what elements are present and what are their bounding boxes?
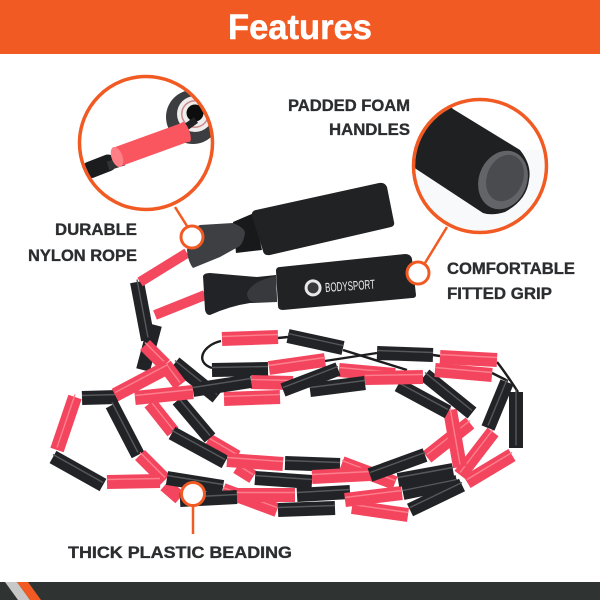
label: padded foam handles: HANDLES (329, 120, 410, 139)
label: thick plastic beading: THICK PLASTIC BEADING (68, 543, 292, 562)
connector: durable nylon rope (175, 207, 203, 248)
connector: thick plastic beading (182, 482, 204, 534)
lower rope segment (155, 295, 205, 315)
label: durable nylon rope (28, 220, 137, 265)
upper handle (187, 183, 394, 268)
header banner: Features (228, 8, 372, 47)
label: comfortable fitted grip: FITTED GRIP (447, 284, 552, 303)
label: durable nylon rope: NYLON ROPE (28, 246, 137, 265)
logo: BODYSPORT (325, 277, 376, 295)
connector: comfortable fitted grip (407, 227, 447, 284)
label: padded foam handles: PADDED FOAM (288, 96, 410, 115)
logo (304, 275, 376, 297)
label: comfortable fitted grip (447, 259, 575, 303)
upper rope segment (140, 253, 187, 282)
footer bar (0, 582, 600, 600)
label: padded foam handles (288, 96, 410, 139)
label: comfortable fitted grip: COMFORTABLE (447, 259, 575, 278)
label: durable nylon rope: DURABLE (55, 220, 137, 239)
callout: nylon rope close-up (80, 76, 220, 210)
header banner (0, 0, 600, 54)
lower handle (203, 254, 416, 315)
beaded jump rope (53, 280, 518, 515)
callout: foam handle close-up (410, 96, 550, 240)
